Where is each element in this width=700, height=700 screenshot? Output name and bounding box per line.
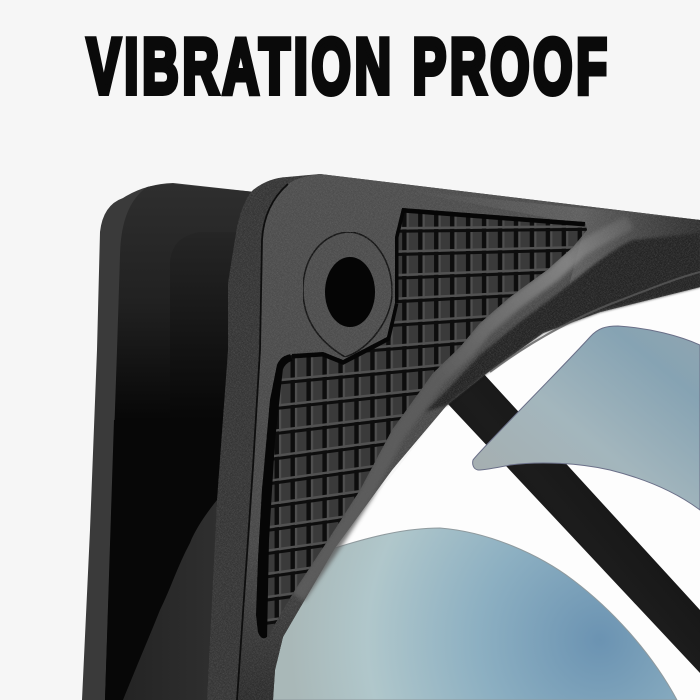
see-through fan opening: [273, 287, 700, 700]
grid row shadows: [257, 228, 587, 626]
panel recess shadow left: [260, 354, 290, 640]
back frame: [82, 183, 260, 700]
fan blade lower: [255, 528, 677, 700]
textured grip panel: [250, 200, 600, 650]
front frame: [207, 174, 700, 700]
front frame bevel groove: [237, 184, 288, 700]
mounting washer: [303, 232, 392, 357]
title: VIBRATION PROOF: [87, 23, 611, 110]
frame lit bevel along opening: [298, 222, 630, 597]
panel recess shadow top: [292, 209, 585, 361]
grid row ridges: [260, 225, 586, 622]
mounting hole: [325, 257, 375, 327]
fan blade upper: [473, 326, 700, 510]
frame inner rim: [490, 272, 700, 372]
fan illustration: [82, 174, 700, 700]
support strut: [447, 373, 700, 673]
